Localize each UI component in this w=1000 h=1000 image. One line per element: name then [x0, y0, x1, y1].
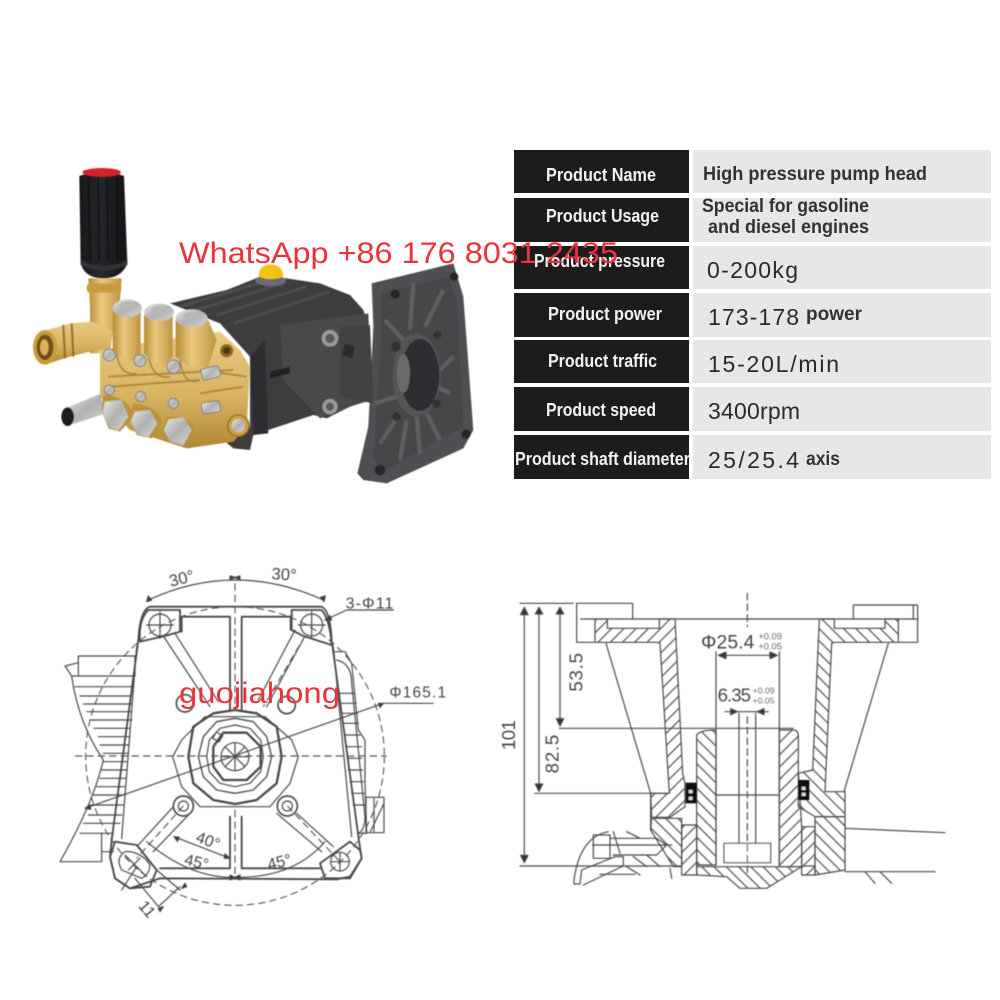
- dimension lines: [521, 607, 777, 863]
- centre boss: [173, 710, 298, 807]
- dimension labels: +0.09: [753, 685, 775, 695]
- row: shaft diameter: [514, 435, 991, 479]
- row: shaft diameter: Product shaft diameter: [515, 449, 690, 469]
- row: product power: [514, 293, 991, 337]
- black adjustment knob: [79, 168, 127, 278]
- row: product usage: [514, 196, 991, 242]
- dimension labels: 11: [135, 898, 158, 922]
- dimension labels: 6.35: [718, 685, 751, 706]
- row: product pressure: 0-200kg: [707, 257, 798, 283]
- dimension labels: Φ165.1: [389, 684, 446, 701]
- row: product usage: and diesel engines: [708, 217, 869, 238]
- dimension labels: 3-Φ11: [346, 596, 393, 613]
- dimension labels: +0.05: [753, 695, 775, 705]
- row: product pressure: Product pressure: [534, 251, 665, 271]
- watermark: guojiahong: guojiahong: [179, 677, 340, 710]
- dimension labels: 30°: [167, 566, 196, 591]
- dimension labels: 45°: [266, 852, 293, 874]
- quick coupler: [33, 322, 112, 365]
- mounting flange: [357, 263, 473, 483]
- row: shaft diameter: 25/25.4: [708, 447, 799, 473]
- dimension labels: 40°: [194, 829, 222, 854]
- outlet nozzle: [61, 394, 106, 426]
- hatched housing walls: [595, 619, 898, 888]
- dimension labels: 53.5: [565, 653, 586, 692]
- ribs: [138, 630, 333, 852]
- row: product pressure: [514, 246, 991, 289]
- corner holes: [119, 612, 349, 878]
- dimension labels: Φ25.4: [701, 632, 755, 653]
- small bolt holes: [173, 695, 297, 816]
- red knob cap: [82, 168, 121, 177]
- dimension labels: 30°: [271, 564, 297, 585]
- dimension labels: 45°: [183, 852, 210, 874]
- row: product speed: Product speed: [546, 400, 656, 420]
- row: product power: power: [806, 304, 863, 325]
- main plate outline: [110, 607, 362, 888]
- row: product traffic: Product traffic: [548, 351, 657, 371]
- dimension lines: [85, 576, 433, 912]
- row: shaft diameter: axis: [806, 449, 840, 470]
- shaft and key lines: [520, 593, 945, 883]
- technical drawing: shaft cross-section: [498, 593, 945, 888]
- hex plugs: [102, 395, 195, 446]
- manifold bolts: [103, 349, 221, 414]
- centre lines and bolt circle: [75, 583, 387, 905]
- gear housing right side: [335, 652, 384, 833]
- watermark: WhatsApp number: WhatsApp +86 176 8031 2435: [179, 237, 618, 270]
- dimension labels: +0.05: [758, 641, 782, 651]
- spec table: [514, 150, 991, 479]
- row: product usage: Product Usage: [546, 206, 659, 226]
- bolt detail: [574, 832, 672, 885]
- row: product name: Product Name: [546, 165, 656, 185]
- dimension labels: [498, 631, 782, 773]
- black seals: [686, 780, 809, 803]
- row: product power: 173-178: [708, 304, 799, 330]
- row: product traffic: 15-20L/min: [708, 351, 839, 377]
- brass manifold: [100, 300, 250, 448]
- row: product traffic: [514, 340, 991, 383]
- row: product name: High pressure pump head: [703, 164, 927, 185]
- gear housing left side: [60, 656, 135, 862]
- row: product power: Product power: [548, 304, 662, 324]
- black crankcase: [170, 277, 373, 450]
- technical drawing: flange front view: [60, 564, 446, 922]
- product photo: pump head: [33, 168, 473, 483]
- corner bosses: [110, 610, 362, 888]
- row: product name: [514, 150, 991, 193]
- dimension labels: 101: [498, 720, 519, 750]
- dimension labels: [135, 564, 446, 922]
- dimension labels: 82.5: [541, 735, 562, 773]
- brass cylinders: [113, 300, 217, 367]
- flange outline: [520, 603, 918, 830]
- row: product speed: 3400rpm: [708, 398, 800, 424]
- pressure valve stem: [87, 278, 122, 353]
- row: product speed: [514, 387, 991, 431]
- icon: yellow oil cap: [255, 264, 286, 286]
- dimension labels: +0.09: [758, 631, 782, 641]
- row: product usage: Special for gasoline: [702, 196, 869, 217]
